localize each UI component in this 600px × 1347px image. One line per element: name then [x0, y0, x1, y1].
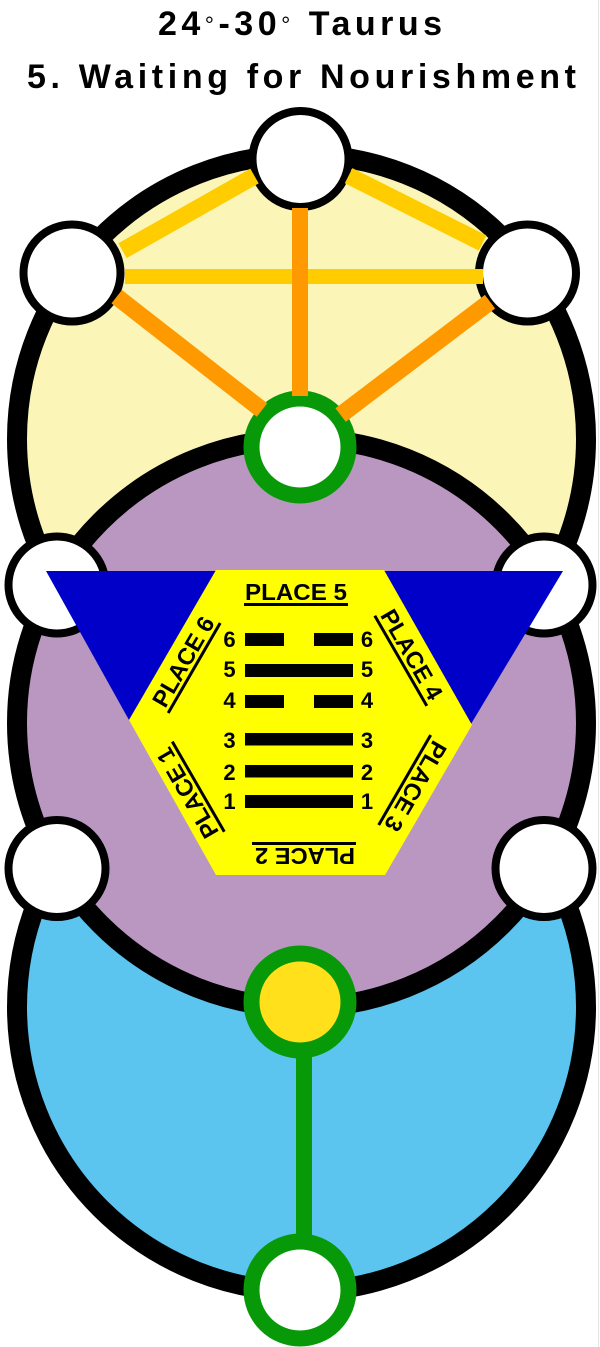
place numbers right: 5	[361, 657, 373, 682]
right edge line	[598, 0, 599, 1347]
blue triangle left	[46, 571, 217, 720]
blue triangle right	[383, 571, 563, 724]
node: middle upper right	[496, 536, 592, 634]
place numbers left: 2	[223, 760, 236, 785]
place numbers right: 2	[361, 760, 373, 785]
place numbers right: 6	[361, 627, 373, 652]
node: middle upper left	[8, 536, 106, 634]
connector: green stem	[296, 1050, 312, 1240]
title: degrees and sign: °	[281, 12, 290, 38]
panel: middle circle	[17, 438, 586, 1008]
title: degrees and sign: °	[205, 12, 214, 38]
label: place 6: PLACE 6	[147, 612, 220, 712]
place numbers right	[361, 627, 374, 814]
title: degrees and sign: Taurus	[295, 5, 442, 43]
title: line name: 5. Waiting for Nourishment	[27, 58, 576, 96]
place numbers left	[223, 627, 236, 814]
place numbers left: 4	[223, 688, 236, 713]
place numbers right: 3	[361, 728, 373, 753]
node: green upper	[252, 398, 348, 496]
node: middle lower left	[8, 820, 106, 917]
place numbers right: 1	[361, 789, 373, 814]
node: upper right	[479, 224, 576, 322]
label: place 5: PLACE 5	[245, 579, 347, 605]
place numbers left: 6	[223, 627, 236, 652]
place numbers right: 4	[361, 688, 374, 713]
title: degrees and sign: -30	[218, 5, 277, 43]
place numbers left: 1	[223, 789, 236, 814]
panel: top circle	[17, 154, 586, 724]
title: degrees and sign: 24	[158, 5, 200, 43]
node: middle lower right	[496, 820, 592, 917]
node: gold center	[252, 954, 348, 1050]
connector lines: upper triangle	[117, 176, 490, 415]
place numbers left: 5	[223, 657, 236, 682]
place numbers left: 3	[223, 728, 236, 753]
hexagon panel	[129, 570, 472, 875]
panel: bottom circle	[17, 722, 586, 1292]
node: bottom green	[252, 1242, 348, 1338]
label: place 4: PLACE 4	[375, 605, 448, 704]
node: top	[252, 111, 348, 207]
label: place 3: PLACE 3	[379, 736, 452, 836]
hexagram bars	[245, 633, 353, 808]
label: place 1: PLACE 1	[151, 743, 224, 843]
label: place 2: PLACE 2	[255, 843, 355, 869]
node: upper left	[24, 224, 120, 322]
